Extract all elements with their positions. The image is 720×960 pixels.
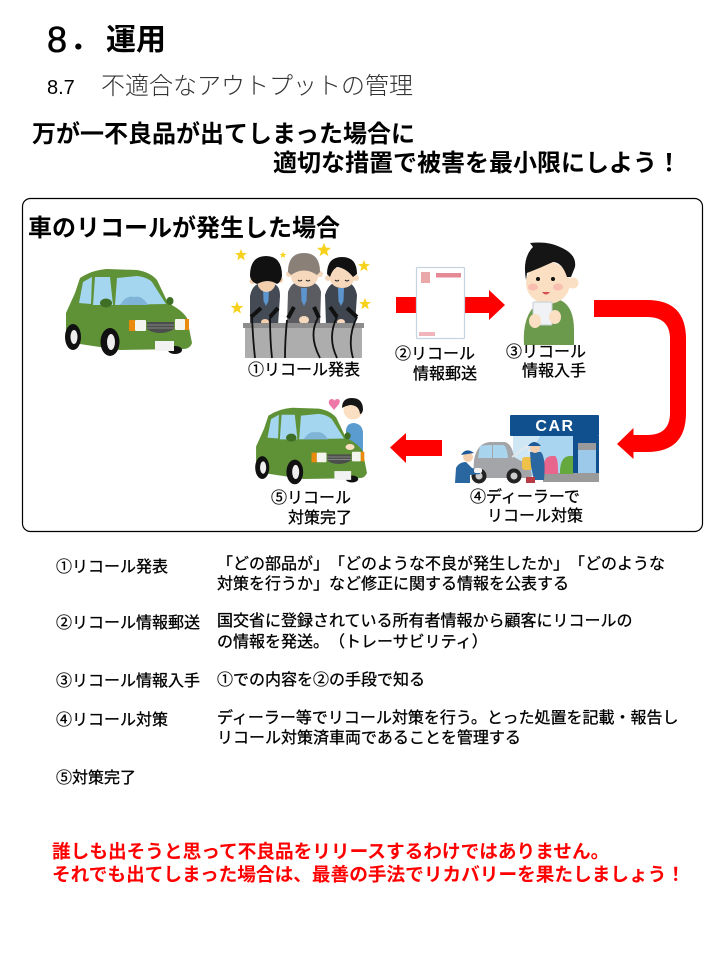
arrow: step 3 to step 4 [594, 300, 686, 459]
row 2: ②リコール情報郵送 [56, 614, 200, 632]
arrow: step 1 to step 3 [396, 290, 505, 320]
row 4 [56, 708, 678, 747]
row 4: ディーラー等でリコール対策を行う。とった処置を記載・報告し [217, 708, 678, 727]
step descriptions [56, 555, 678, 787]
row 1: 対策を行うか」など修正に関する情報を公表する [217, 575, 569, 593]
row 3: ③リコール情報入手 [56, 672, 200, 690]
section heading: 8.7 [47, 77, 75, 99]
title: 運用 [106, 24, 166, 57]
title [47, 19, 166, 60]
row 2 [56, 612, 633, 651]
icon: happy owner with car [255, 398, 367, 484]
panel heading: 車のリコールが発生した場合 [28, 214, 340, 242]
row 5: ⑤対策完了 [56, 769, 136, 787]
label: step 3 [506, 343, 586, 380]
row 2: 国交省に登録されている所有者情報から顧客にリコールの [217, 612, 633, 630]
label: step 4 [470, 487, 583, 525]
icon: postcard [416, 268, 464, 338]
panel: recall flow [22, 198, 702, 532]
label: step 3: ③リコール [506, 343, 586, 361]
lead message [32, 120, 681, 177]
icon: apologising executives [231, 243, 371, 358]
lead message: 万が一不良品が出てしまった場合に [32, 120, 415, 148]
label: step 2 [395, 345, 477, 383]
label: step 3: 情報入手 [522, 362, 586, 380]
label: step 2: 情報郵送 [413, 365, 477, 383]
icon: car dealer: CAR [535, 418, 575, 435]
row 1 [56, 555, 665, 593]
icon: green car [65, 269, 192, 356]
label: step 4: ④ディーラーで [470, 487, 580, 506]
title: 8 [47, 19, 67, 60]
title: ． [70, 24, 100, 57]
label: step 2: ②リコール [395, 345, 475, 363]
row 2: の情報を発送。（トレーサビリティ） [217, 633, 488, 651]
label: step 5: 対策完了 [288, 509, 352, 527]
row 1: ①リコール発表 [56, 558, 168, 576]
closing message [52, 841, 685, 885]
label: step 5 [271, 489, 352, 527]
row 3 [56, 671, 425, 690]
closing message: それでも出てしまった場合は、最善の手法でリカバリーを果たしましょう！ [52, 864, 685, 885]
icon: car dealer [455, 415, 599, 484]
row 3: ①での内容を②の手段で知る [217, 671, 425, 689]
label: step 4: リコール対策 [487, 507, 583, 525]
icon: person reading notice [524, 242, 578, 345]
arrow: step 4 to step 5 [390, 433, 442, 463]
row 4: ④リコール対策 [56, 711, 168, 729]
row 4: リコール対策済車両であることを管理する [217, 729, 521, 747]
label: step 5: ⑤リコール [271, 489, 351, 507]
row 1: 「どの部品が」「どのような不良が発生したか」「どのような [217, 555, 665, 573]
section heading: 不適合なアウトプットの管理 [101, 73, 413, 100]
label: step 1: ①リコール発表 [248, 361, 360, 379]
closing message: 誰しも出そうと思って不良品をリリースするわけではありません。 [52, 841, 609, 862]
lead message: 適切な措置で被害を最小限にしよう！ [273, 150, 681, 177]
